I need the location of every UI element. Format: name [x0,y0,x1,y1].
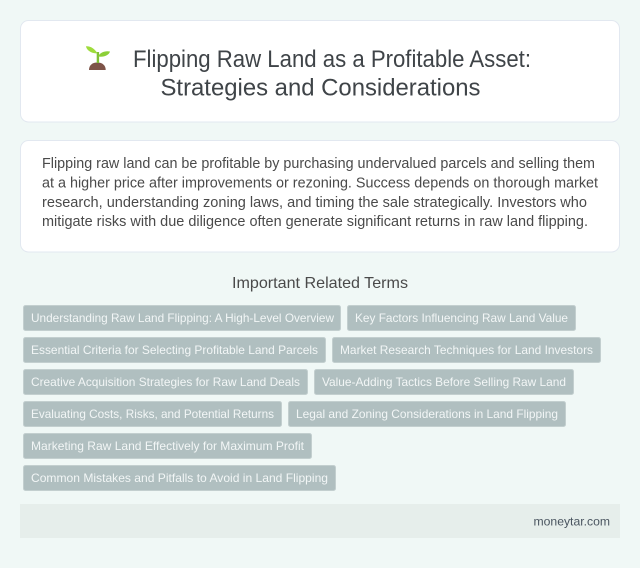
footer: moneytar.com [534,514,610,528]
text block: description: mitigate risks with due diligence often generate significant returns in raw land flipping. [42,214,588,230]
tag 7: Evaluating Costs, Risks, and Potential Returns [31,407,274,421]
tag 4 [332,338,600,362]
title [133,46,531,102]
tag 1 [24,306,340,330]
tag 6 [314,370,574,394]
tag 9 [24,434,312,458]
tag 2: Key Factors Influencing Raw Land Value [355,311,568,325]
tag list [24,306,600,490]
tag 6: Value-Adding Tactics Before Selling Raw Land [322,375,566,389]
tag 8: Legal and Zoning Considerations in Land Flipping [296,407,558,421]
tag 4: Market Research Techniques for Land Investors [340,343,593,357]
tag 5 [24,370,308,394]
title: Strategies and Considerations [160,74,480,102]
tag 3: Essential Criteria for Selecting Profitable Land Parcels [31,343,318,357]
panel: description card [20,140,620,252]
tag 3 [24,338,326,362]
tag 5: Creative Acquisition Strategies for Raw Land Deals [31,375,300,389]
tag 10: Common Mistakes and Pitfalls to Avoid in Land Flipping [31,471,328,485]
footer [20,504,620,538]
text block: description: at a higher price after improvements or rezoning. Success depends on thorough market [42,176,598,192]
text block: description: research, understanding zoning laws, and timing the sale strategically. Investors who [42,195,587,211]
heading: related terms: Important Related Terms [232,275,408,292]
tag 2 [348,306,576,330]
title: Flipping Raw Land as a Profitable Asset: [133,46,531,73]
text block: description: Flipping raw land can be profitable by purchasing undervalued parcels and selling them [42,156,595,172]
tag 1: Understanding Raw Land Flipping: A High-Level Overview [31,311,334,325]
tag 9: Marketing Raw Land Effectively for Maximum Profit [31,439,305,453]
tag 10 [24,466,336,490]
panel: title card [20,20,620,122]
text block: description [42,156,598,230]
icon: seedling [86,46,110,70]
tag 8 [288,402,566,426]
tag 7 [24,402,282,426]
